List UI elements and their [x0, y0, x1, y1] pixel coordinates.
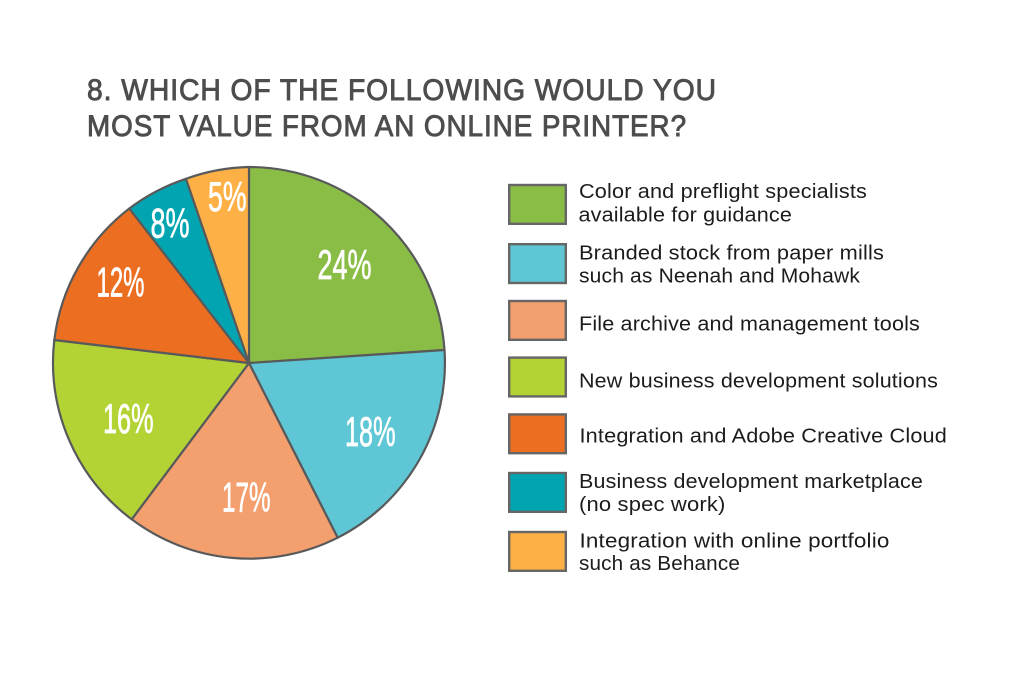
slice: 8% business development marketplace	[129, 179, 249, 363]
percentage labels: 5%	[208, 173, 246, 220]
legend item: file archive: File archive and management tools	[579, 313, 920, 336]
slice: 18% branded stock	[249, 350, 445, 538]
legend item: business development marketplace	[509, 470, 923, 516]
legend item: branded stock	[509, 241, 884, 288]
title	[87, 74, 717, 143]
percentage labels: 24%	[318, 241, 372, 288]
legend	[509, 180, 947, 575]
slice: 16% new business development	[53, 340, 249, 519]
legend item: branded stock: Branded stock from paper mills	[579, 241, 884, 264]
legend item: new business development: New business development solutions	[579, 369, 938, 392]
percentage labels	[96, 173, 396, 520]
legend item: Adobe Creative Cloud integration	[509, 414, 947, 453]
legend item: online portfolio integration	[509, 529, 890, 575]
legend item: color and preflight specialists: Color and preflight specialists	[579, 180, 867, 203]
percentage labels: 18%	[345, 408, 396, 455]
legend item: file archive	[509, 301, 920, 340]
legend item: business development marketplace: (no spec work)	[579, 493, 726, 516]
legend item: color and preflight specialists	[509, 180, 867, 226]
percentage labels: 16%	[103, 395, 154, 442]
title: 8. WHICH OF THE FOLLOWING WOULD YOU	[87, 74, 717, 107]
legend item: Adobe Creative Cloud integration: Integration and Adobe Creative Cloud	[580, 425, 947, 448]
legend item: color and preflight specialists: available for guidance	[578, 204, 792, 226]
percentage labels: 12%	[96, 258, 144, 306]
legend item: branded stock: such as Neenah and Mohawk	[579, 265, 861, 288]
legend item: online portfolio integration: such as Behance	[579, 552, 740, 575]
percentage labels: 17%	[222, 474, 270, 520]
legend item: business development marketplace: Business development marketplace	[579, 470, 923, 493]
slice: 12% Adobe Creative Cloud integration	[54, 208, 249, 363]
title: MOST VALUE FROM AN ONLINE PRINTER?	[87, 110, 687, 143]
percentage labels: 8%	[150, 200, 190, 246]
slice: 17% file archive	[132, 363, 338, 559]
slice: 24% color and preflight specialists	[249, 167, 444, 363]
slice: 5% online portfolio integration	[186, 167, 249, 363]
pie chart	[53, 167, 445, 559]
legend item: new business development	[509, 358, 938, 396]
legend item: online portfolio integration: Integration with online portfolio	[580, 529, 890, 552]
